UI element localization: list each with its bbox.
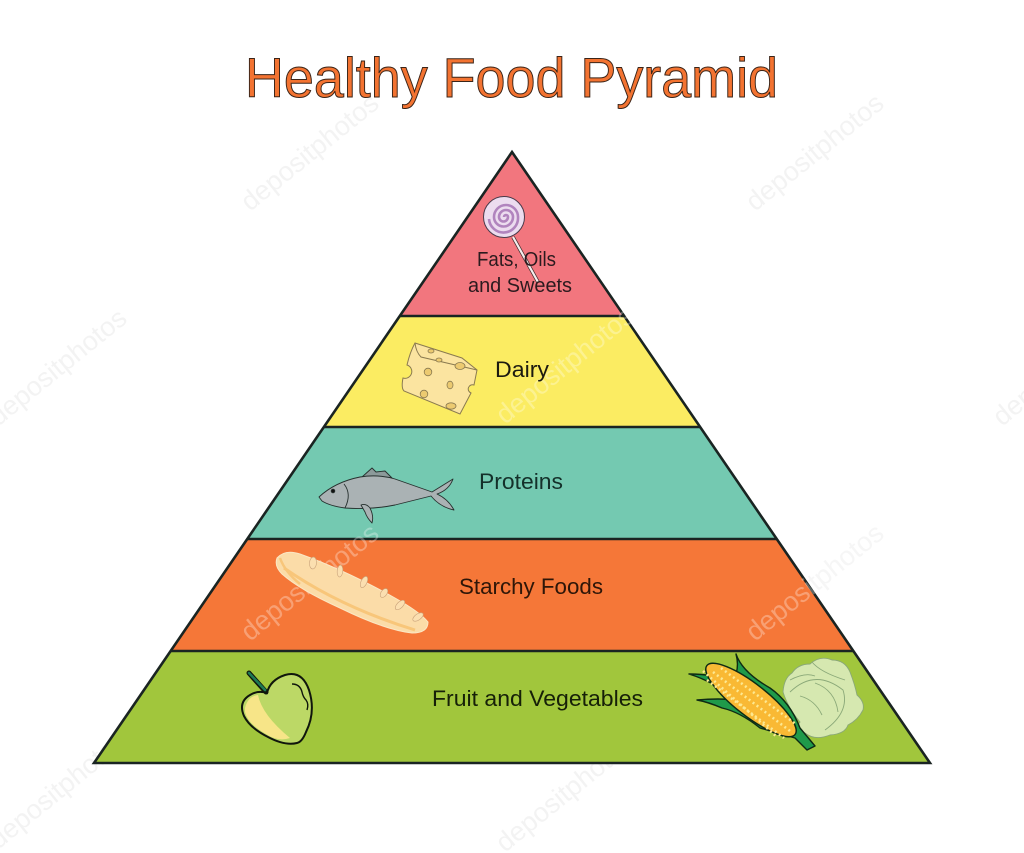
watermarks on pyramid: depositphotos <box>235 518 384 647</box>
watermarks on white background: depositphotos <box>740 518 889 647</box>
label: proteins: Proteins <box>479 469 563 494</box>
icon: corn <box>689 653 815 750</box>
icon: bread <box>276 552 428 633</box>
watermarks on white background: depositphotos <box>740 88 889 217</box>
icon: fish <box>319 468 454 523</box>
food pyramid <box>94 152 930 763</box>
label: starchy foods: Starchy Foods <box>459 574 603 599</box>
watermarks on white background: depositphotos <box>235 88 384 217</box>
panel: fats, oils and sweets tier <box>400 152 624 316</box>
watermarks on pyramid: depositphotos <box>740 518 889 647</box>
label: fats, oils and sweets <box>468 249 572 297</box>
panel: proteins tier <box>247 427 777 539</box>
panel: fruit and vegetables tier <box>94 651 930 763</box>
icon: apple <box>242 673 312 744</box>
title: Healthy Food Pyramid <box>245 46 778 109</box>
label: fats, oils and sweets: Fats, Oils <box>477 249 556 271</box>
icon: lollipop <box>484 196 538 282</box>
label: fruit and vegetables: Fruit and Vegetables <box>432 686 643 711</box>
watermarks on pyramid: depositphotos <box>490 301 639 430</box>
icon: cabbage <box>783 658 863 738</box>
label: fats, oils and sweets: and Sweets <box>468 275 572 297</box>
panel: dairy tier <box>324 316 700 427</box>
panel: starchy foods tier <box>171 539 853 651</box>
icon: cheese <box>402 343 477 414</box>
watermarks on pyramid <box>235 301 889 647</box>
label: dairy: Dairy <box>495 357 550 382</box>
